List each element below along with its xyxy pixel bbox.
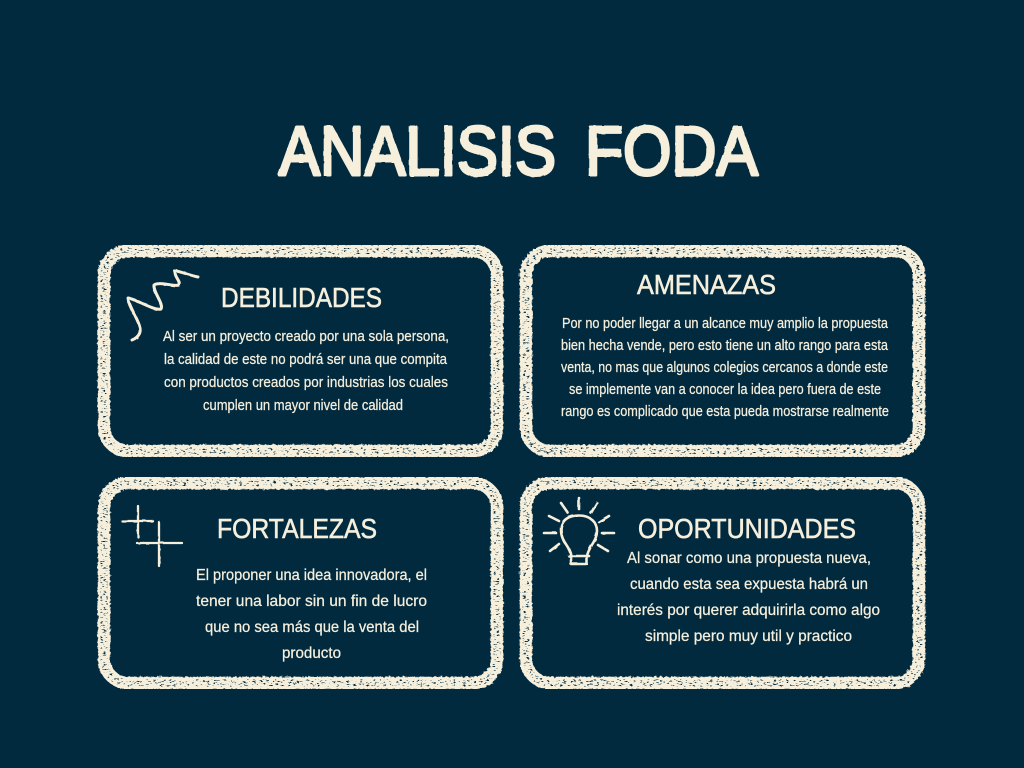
text: debilidades	[163, 328, 449, 414]
text: amenazas: se implemente van a conocer la idea pero fuera de este	[569, 381, 881, 398]
icon: light bulb	[544, 498, 614, 564]
title	[279, 112, 758, 190]
text: amenazas: venta, no mas que algunos colegios cercanos a donde este	[561, 359, 888, 376]
panel: amenazas	[526, 251, 919, 451]
heading: oportunidades: OPORTUNIDADES	[638, 513, 856, 544]
text: debilidades: con productos creados por industrias los cuales	[164, 374, 448, 391]
text: amenazas: rango es complicado que esta pueda mostrarse realmente	[561, 403, 889, 420]
panel: debilidades	[104, 251, 497, 451]
text: amenazas	[561, 315, 889, 420]
frame: debilidades	[104, 251, 497, 451]
title: ANALISIS	[279, 112, 556, 190]
text: debilidades: cumplen un mayor nivel de calidad	[203, 397, 403, 414]
text: fortalezas: producto	[282, 645, 341, 662]
text: fortalezas: que no sea más que la venta del	[205, 619, 419, 636]
text: oportunidades: interés por querer adquirirla como algo	[617, 602, 880, 619]
text: amenazas: bien hecha vende, pero esto tiene un alto rango para esta	[561, 337, 889, 354]
text: oportunidades: Al sonar como una propuesta nueva,	[627, 550, 871, 567]
panel: fortalezas	[104, 483, 497, 683]
text: fortalezas: El proponer una idea innovadora, el	[196, 567, 427, 584]
icon: plus signs	[122, 506, 182, 566]
text: oportunidades: cuando esta sea expuesta habrá un	[630, 576, 868, 593]
text: amenazas: Por no poder llegar a un alcance muy amplio la propuesta	[562, 315, 889, 332]
heading: amenazas: AMENAZAS	[637, 269, 776, 300]
icon: squiggle	[128, 271, 198, 340]
text: debilidades: la calidad de este no podrá ser una que compita	[164, 351, 448, 368]
frame: fortalezas	[104, 483, 497, 683]
frame: amenazas	[526, 251, 919, 451]
text: debilidades: Al ser un proyecto creado por una sola persona,	[163, 328, 449, 345]
panel: oportunidades	[526, 483, 919, 683]
title: FODA	[585, 112, 758, 190]
text: oportunidades: simple pero muy util y practico	[645, 628, 852, 645]
text: fortalezas: tener una labor sin un fin de lucro	[196, 593, 427, 610]
heading: debilidades: DEBILIDADES	[221, 282, 382, 313]
heading: fortalezas: FORTALEZAS	[217, 513, 377, 544]
text: oportunidades	[617, 550, 880, 645]
frame: oportunidades	[526, 483, 919, 683]
text: fortalezas	[196, 567, 427, 662]
